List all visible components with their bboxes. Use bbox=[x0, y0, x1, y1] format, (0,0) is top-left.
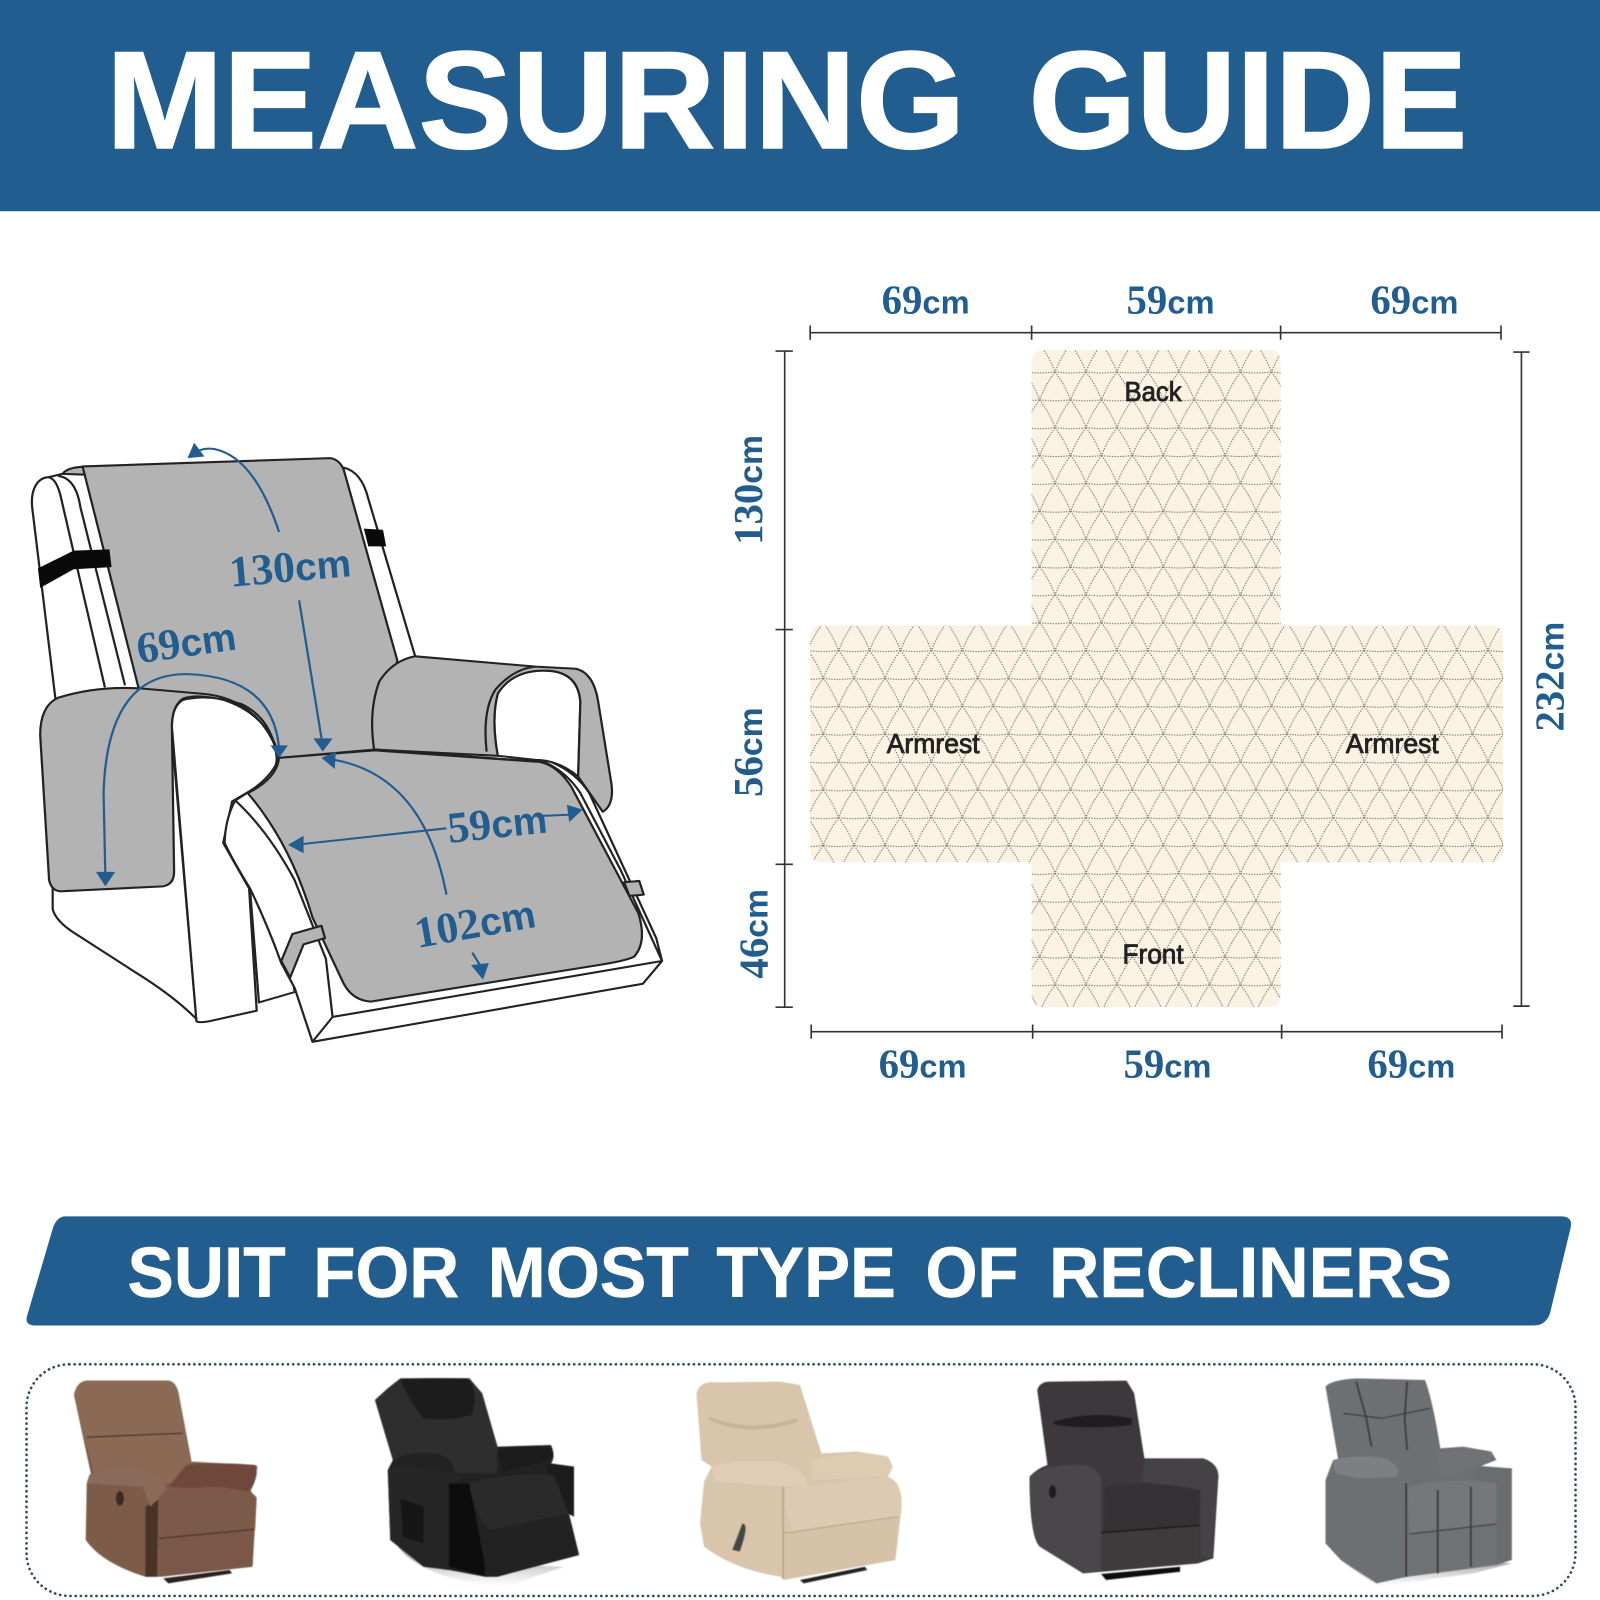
label 59cm seat: 59cm bbox=[445, 795, 549, 853]
label 102cm: 102cm bbox=[411, 889, 539, 958]
bottom dimension line bbox=[811, 1024, 1502, 1039]
top label 69cm left: 69cm bbox=[882, 277, 970, 322]
side label 46cm: 46cm bbox=[731, 889, 776, 979]
header band bbox=[0, 0, 1600, 211]
left dimension line bbox=[776, 351, 793, 1007]
recliner types banner bbox=[27, 1216, 1571, 1326]
right dimension line bbox=[1513, 352, 1530, 1006]
top dimension line bbox=[810, 326, 1501, 340]
recliner line drawing bbox=[32, 443, 662, 1042]
left arm cover bbox=[40, 688, 279, 891]
side label 56cm: 56cm bbox=[726, 707, 771, 797]
cover layout panel bbox=[726, 277, 1572, 1087]
photo: brown recliner bbox=[74, 1381, 258, 1583]
title: GUIDE bbox=[1029, 23, 1467, 178]
bottom label 59cm: 59cm bbox=[1123, 1042, 1211, 1087]
side label 130cm: 130cm bbox=[726, 435, 771, 545]
banner heading: TYPE bbox=[716, 1233, 896, 1313]
black straps bbox=[38, 529, 386, 588]
bottom label 69cm right: 69cm bbox=[1367, 1042, 1455, 1087]
top label 69cm right: 69cm bbox=[1370, 277, 1458, 322]
photo: beige recliner bbox=[696, 1382, 902, 1583]
footrest frame bbox=[225, 750, 662, 1042]
right arm cover bbox=[494, 671, 580, 777]
side label 232cm: 232cm bbox=[1527, 622, 1572, 732]
label Armrest right: Armrest bbox=[1346, 728, 1439, 759]
title bbox=[106, 23, 1467, 178]
recliner diagram with measurements bbox=[32, 443, 662, 1042]
label Back: Back bbox=[1124, 376, 1182, 407]
label 69cm arm: 69cm bbox=[133, 612, 239, 673]
cross-shaped cover bbox=[810, 350, 1503, 1007]
top label 59cm: 59cm bbox=[1127, 277, 1215, 322]
photo: black recliner bbox=[375, 1378, 579, 1587]
banner heading: RECLINERS bbox=[1049, 1233, 1452, 1313]
photo: dark leather recliner bbox=[1030, 1381, 1218, 1580]
banner heading bbox=[128, 1233, 1452, 1313]
banner heading: MOST bbox=[488, 1233, 689, 1313]
photo: grey fabric recliner bbox=[1326, 1378, 1512, 1587]
seat cover bbox=[248, 750, 642, 1002]
measurement arrows bbox=[96, 443, 583, 980]
label 130cm: 130cm bbox=[227, 538, 353, 597]
label Armrest left: Armrest bbox=[887, 728, 980, 759]
title: MEASURING bbox=[106, 23, 965, 178]
label Front: Front bbox=[1122, 938, 1184, 969]
banner heading: SUIT bbox=[128, 1233, 286, 1313]
banner heading: OF bbox=[926, 1233, 1018, 1313]
dotted recliner panel bbox=[27, 1364, 1576, 1596]
banner heading: FOR bbox=[313, 1233, 459, 1313]
bottom label 69cm left: 69cm bbox=[879, 1042, 967, 1087]
